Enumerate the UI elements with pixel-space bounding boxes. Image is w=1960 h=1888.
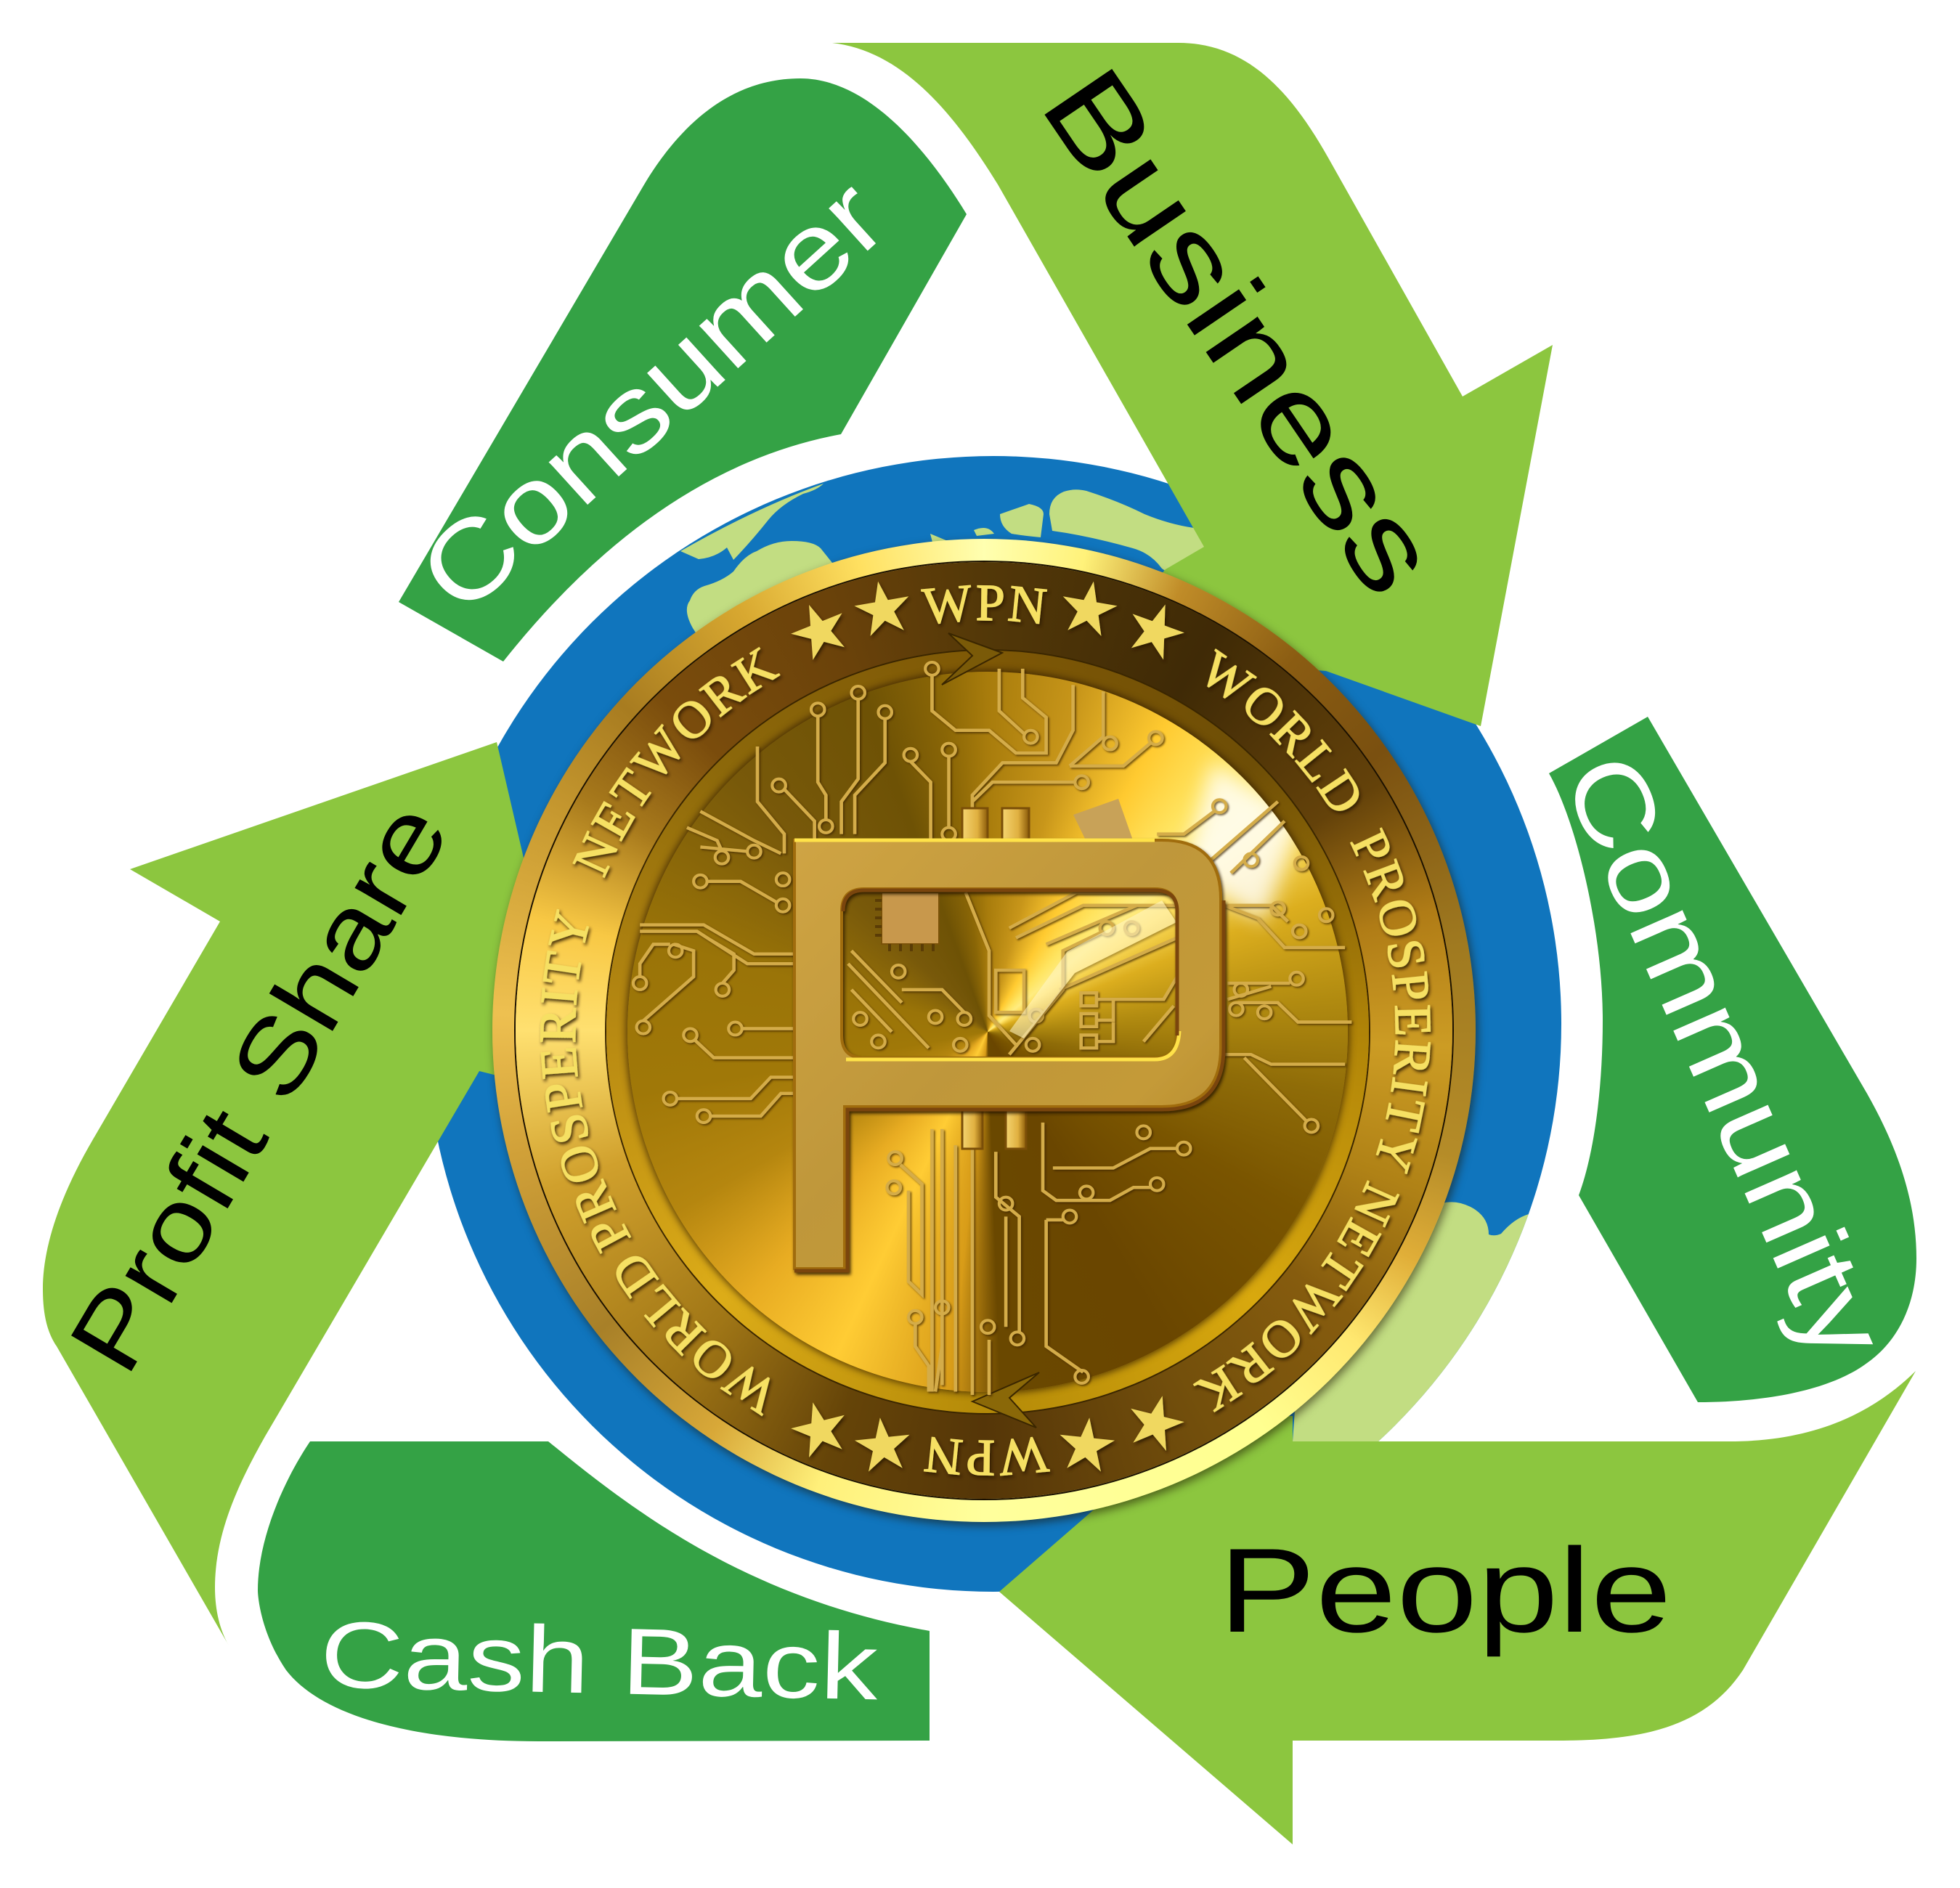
label: Profit Share: Profit Share — [47, 783, 471, 1391]
ring lettering — [539, 585, 1435, 1480]
band: Consumer — [396, 78, 967, 662]
arrow: Business — [832, 43, 1553, 726]
PROSPERITY right: PROSPERITY — [1349, 827, 1435, 1178]
label: Business: Business — [1017, 44, 1465, 617]
arrow: Profit Share — [43, 742, 581, 1645]
circuit components — [996, 970, 1097, 1048]
flare highlight — [1184, 762, 1300, 922]
PROSPERITY left: PROSPERITY — [539, 909, 635, 1258]
label: Consumer: Consumer — [396, 155, 908, 636]
microchip top right — [1073, 799, 1133, 840]
NETWORK lower right: NETWORK — [1192, 1180, 1403, 1416]
gold WPN coin — [492, 539, 1476, 1522]
coin engraving — [539, 581, 1435, 1480]
label: People: People — [1219, 1523, 1672, 1657]
label: Community: Community — [1540, 737, 1910, 1377]
globe ocean — [426, 456, 1561, 1592]
NETWORK upper left: NETWORK — [572, 646, 783, 882]
microchip left — [875, 892, 939, 951]
band: Community — [1540, 717, 1916, 1402]
letter P — [794, 840, 1224, 1271]
coin face — [627, 672, 1348, 1392]
WORLD lower left: WORLD — [615, 1256, 773, 1420]
letter P pins — [962, 808, 1029, 1149]
band: Cash Back — [258, 1441, 930, 1741]
label: Cash Back: Cash Back — [319, 1601, 880, 1720]
WORLD upper right: WORLD — [1207, 648, 1362, 815]
coin inner groove — [606, 651, 1369, 1413]
stars — [784, 577, 1191, 1473]
diagonal light streak — [1009, 900, 1176, 1038]
circuit traces — [633, 662, 1351, 1395]
globe land masses — [680, 484, 1529, 1441]
coin band ring — [516, 562, 1452, 1499]
P highlight edges — [794, 840, 1179, 1059]
arrow: People — [999, 1371, 1916, 1844]
groove arrowhead top — [942, 633, 1002, 685]
coin outer rim — [492, 539, 1476, 1522]
groove arrowhead bottom — [972, 1372, 1039, 1428]
globe — [426, 456, 1670, 1592]
WPN bottom: WPN — [924, 1436, 1053, 1480]
trace pads — [633, 662, 1333, 1383]
WPN top: WPN — [921, 585, 1049, 627]
